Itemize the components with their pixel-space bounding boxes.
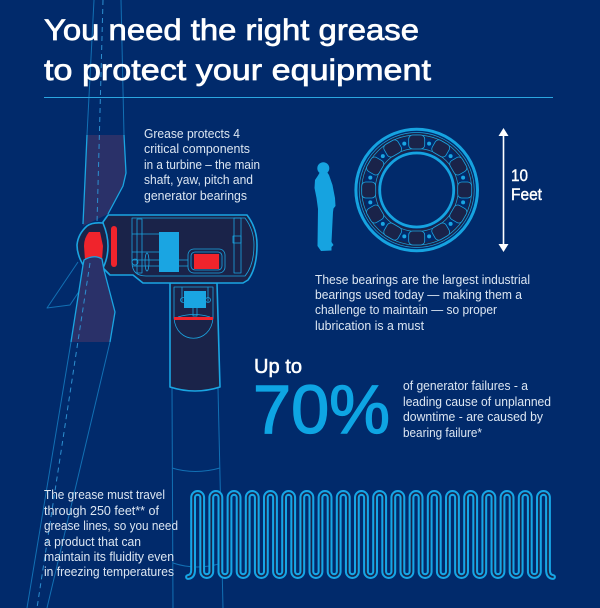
- icon: bearing ring: [356, 129, 478, 251]
- text: grease protects components: in a turbine – the main: [144, 158, 260, 172]
- text: largest bearings: lubrication is a must: [315, 319, 425, 333]
- text: generator failures: [403, 379, 551, 440]
- text: generator failures: leading cause of unplanned: [403, 395, 551, 409]
- upper blade: [83, 0, 126, 226]
- label: 10 feet: Feet: [511, 185, 542, 204]
- title: You need the right grease: [44, 14, 419, 47]
- main shaft bearing: [111, 226, 117, 267]
- arrow: 10 feet dimension: [498, 128, 508, 252]
- text: generator failures: bearing failure*: [403, 426, 482, 440]
- lower blade: [27, 257, 115, 608]
- title: to protect your equipment: [44, 54, 432, 87]
- text: grease protects components: [144, 127, 260, 203]
- title: [44, 14, 432, 87]
- text: grease lines: [44, 488, 178, 579]
- stat: up to 70%: Up to: [254, 356, 302, 378]
- serpentine grease line: [188, 493, 553, 577]
- text: grease lines: a product that can: [44, 535, 141, 549]
- text: generator failures: of generator failures - a: [403, 379, 528, 393]
- nacelle internals: [132, 218, 254, 276]
- text: grease lines: in freezing temperatures: [44, 565, 174, 579]
- text: largest bearings: These bearings are the largest industrial: [315, 273, 530, 287]
- text: grease protects components: generator bearings: [144, 189, 247, 203]
- text: largest bearings: challenge to maintain — so proper: [315, 303, 497, 317]
- text: grease lines: grease lines, so you need: [44, 519, 178, 533]
- roller dots: [368, 142, 465, 238]
- text: largest bearings: bearings used today — making them a: [315, 288, 522, 302]
- wind turbine illustration: [27, 0, 257, 608]
- rotor hub: [77, 223, 108, 268]
- stat: up to 70%: 70%: [253, 371, 390, 448]
- text: grease protects components: Grease protects 4: [144, 127, 240, 141]
- text: grease lines: The grease must travel: [44, 488, 165, 502]
- label: 10 feet: 10: [511, 166, 528, 185]
- label: 10 feet: [511, 166, 542, 204]
- text: largest bearings: [315, 273, 530, 333]
- icon: person silhouette: [314, 162, 336, 251]
- rollers: [362, 135, 472, 245]
- rear blade: [47, 262, 80, 308]
- text: grease protects components: shaft, yaw, pitch and: [144, 173, 253, 187]
- nacelle: [103, 215, 257, 283]
- text: grease lines: maintain its fluidity even: [44, 550, 174, 564]
- text: generator failures: downtime - are caused by: [403, 410, 544, 424]
- yaw bearing assembly: [174, 287, 213, 338]
- text: grease protects components: critical components: [144, 142, 250, 156]
- tower: [170, 283, 223, 608]
- text: grease lines: through 250 feet** of: [44, 504, 160, 518]
